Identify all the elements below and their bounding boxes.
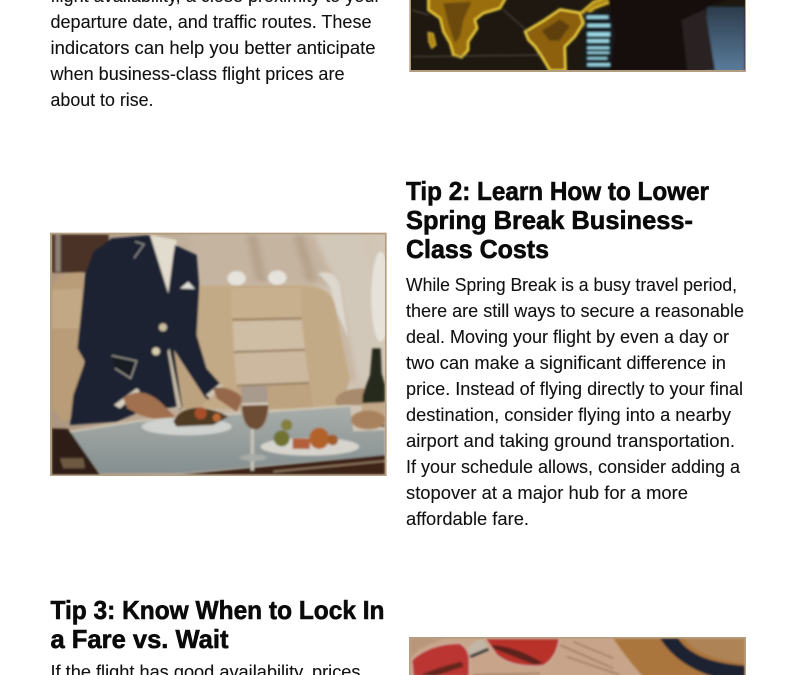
text block: tip 2 paragraph: airport and taking ground transportation. <box>406 431 735 451</box>
wine bottle <box>362 348 385 427</box>
heading: tip 2 <box>406 176 709 264</box>
businessman suit <box>707 7 745 72</box>
text block: tip 2 paragraph: there are still ways to secure a reasonable <box>406 301 744 321</box>
sunglasses <box>485 638 559 666</box>
wine glass <box>241 385 269 430</box>
text block: tip 2 paragraph: price. Instead of flying directly to your final <box>406 379 743 399</box>
text block: tip 2 paragraph: two can make a significant difference in <box>406 353 726 373</box>
text block: tip 2 paragraph <box>406 275 744 529</box>
heading: tip 3 <box>50 595 384 654</box>
windows <box>227 271 246 286</box>
text block: tip 2 paragraph: While Spring Break is a busy travel period, <box>406 275 737 295</box>
data panel <box>584 12 613 70</box>
hands and cuffs <box>114 388 140 408</box>
text block: tip 2 paragraph: If your schedule allows, consider adding a <box>406 457 741 477</box>
heading: tip 2: Tip 2: Learn How to Lower <box>406 176 709 206</box>
heading: tip 3: Tip 3: Know When to Lock In <box>50 595 384 625</box>
seats <box>52 272 83 422</box>
South America <box>525 9 583 71</box>
heading: tip 2: Spring Break Business- <box>406 205 693 235</box>
attendant shirt <box>148 234 177 295</box>
cabin wall <box>52 234 109 273</box>
text block: tip 1 closing paragraph: indicators can help you better anticipate <box>50 38 376 58</box>
attendant jacket <box>70 235 220 425</box>
text block: tip 2 paragraph: destination, consider flying into a nearby <box>406 405 731 425</box>
image: glowing gold world map with businessman <box>409 0 746 72</box>
text block: tip 1 closing paragraph: departure date, and traffic routes. These <box>50 12 372 32</box>
heading: tip 2: Class Costs <box>406 234 549 264</box>
text block: tip 1 closing paragraph <box>49 0 380 110</box>
text block: tip 2 paragraph: affordable fare. <box>406 509 529 529</box>
Africa <box>428 0 507 57</box>
text block: tip 1 closing paragraph: about to rise. <box>50 90 154 110</box>
image: red sunglasses and straw hat on wood <box>409 637 746 675</box>
heading: tip 3: a Fare vs. Wait <box>50 624 229 654</box>
straw hat <box>613 638 745 675</box>
image: flight attendant serving a meal in a luxury cabin <box>50 233 390 476</box>
table <box>68 406 385 473</box>
text block: tip 2 paragraph: deal. Moving your flight by even a day or <box>406 327 729 347</box>
text block: tip 1 closing paragraph: when business-class flight prices are <box>49 64 344 84</box>
text block: tip 2 paragraph: stopover at a major hub for a more <box>406 483 688 503</box>
plates of food <box>142 418 232 435</box>
